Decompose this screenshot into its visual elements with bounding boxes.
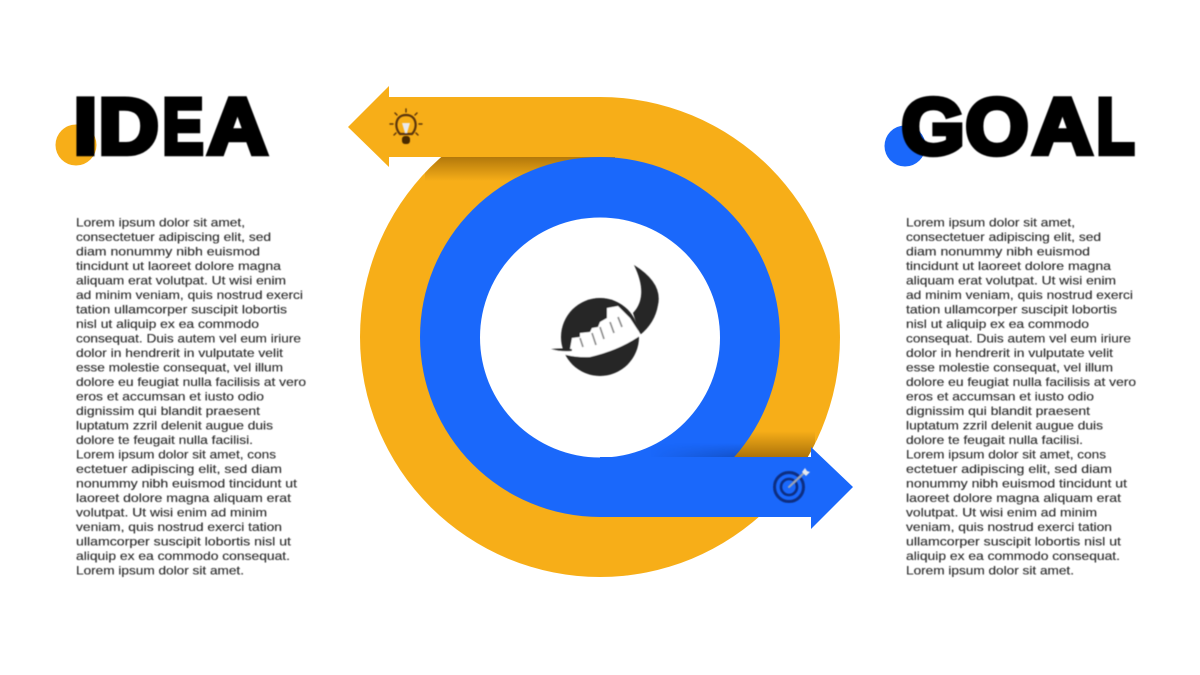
icon: orange dot <box>56 124 96 166</box>
text block: goal description: volutpat. Ut wisi enim ad minim <box>906 506 1097 520</box>
white centre <box>480 218 720 458</box>
text block: idea description: ullamcorper suscipit lobortis nisl ut <box>76 536 292 548</box>
text block: goal description: dignissim qui blandit praesent <box>906 405 1091 418</box>
text block: idea description: dolor in hendrerit in vulputate velit <box>76 347 284 360</box>
heading: goal: O <box>966 82 1028 170</box>
panel: goal <box>884 82 1136 578</box>
text block: idea description: dolore eu feugiat nulla facilisis at vero <box>76 376 306 389</box>
text block: goal description: nisl ut aliquip ex ea commodo <box>906 318 1089 331</box>
text block: idea description: dolore te feugait nulla facilisi. <box>76 434 253 447</box>
arrow: orange pointing left <box>348 86 600 167</box>
text block: goal description: consequat. Duis autem vel eum iriure <box>906 332 1131 346</box>
text block: idea description: aliquam erat volutpat. Ut wisi enim <box>76 274 286 288</box>
text block: goal description: consectetuer adipiscing elit, sed <box>906 231 1101 244</box>
text block: idea description: volutpat. Ut wisi enim ad minim <box>76 506 267 520</box>
text block: idea description: tation ullamcorper suscipit lobortis <box>76 304 287 316</box>
heading: goal: G <box>902 82 964 170</box>
text block: idea description: dignissim qui blandit praesent <box>76 405 261 418</box>
text block: goal description: tincidunt ut laoreet dolore magna <box>906 260 1112 273</box>
text block: idea description: veniam, quis nostrud exerci tation <box>76 521 282 534</box>
text block: goal description: luptatum zzril delenit augue duis <box>906 420 1103 432</box>
heading: goal <box>902 82 1134 170</box>
text block: idea description: consectetuer adipiscing elit, sed <box>76 231 271 244</box>
icon: target with dart <box>774 468 810 502</box>
shadow above blue arrow on orange <box>734 434 815 457</box>
orange ring <box>360 97 840 577</box>
text block: goal description: diam nonummy nibh euismod <box>906 246 1090 258</box>
text block: idea description: luptatum zzril delenit augue duis <box>76 420 273 432</box>
heading: idea <box>74 82 268 170</box>
icon: blue dot <box>884 126 926 166</box>
text block: goal description: dolore eu feugiat nulla facilisis at vero <box>906 376 1136 389</box>
text block: idea description: Lorem ipsum dolor sit amet, cons <box>76 448 276 462</box>
text block: idea description: esse molestie consequat, vel illum <box>76 362 283 374</box>
text block: idea description: ad minim veniam, quis nostrud exerci <box>76 289 303 302</box>
text block: idea description: nisl ut aliquip ex ea commodo <box>76 318 259 331</box>
text block: idea description: diam nonummy nibh euismod <box>76 246 260 258</box>
hand <box>551 306 641 357</box>
heading: idea: A <box>208 82 268 170</box>
text block: idea description <box>76 216 306 578</box>
text block: idea description: aliquip ex ea commodo consequat. <box>76 550 290 563</box>
blue ring <box>420 157 780 517</box>
shadow under orange arrow <box>425 157 615 178</box>
text block: goal description: Lorem ipsum dolor sit amet, <box>906 216 1075 230</box>
text block: goal description: dolor in hendrerit in vulputate velit <box>906 347 1114 360</box>
text block: goal description: esse molestie consequat, vel illum <box>906 362 1113 374</box>
heading: goal: L <box>1096 82 1134 170</box>
text block: goal description <box>906 216 1136 578</box>
shadow on blue ring <box>664 445 744 457</box>
text block: idea description: nonummy nibh euismod tincidunt ut <box>76 478 298 490</box>
heading: idea: D <box>99 82 159 170</box>
crescent <box>633 265 659 335</box>
text block: goal description: tation ullamcorper suscipit lobortis <box>906 304 1117 316</box>
text block: idea description: tincidunt ut laoreet dolore magna <box>76 260 282 273</box>
text block: goal description: nonummy nibh euismod tincidunt ut <box>906 478 1128 490</box>
arrow: blue pointing right <box>600 447 853 529</box>
text block: goal description: Lorem ipsum dolor sit amet. <box>906 564 1074 578</box>
text block: goal description: ectetuer adipiscing elit, sed diam <box>906 463 1112 476</box>
text block: goal description: aliquip ex ea commodo consequat. <box>906 550 1120 563</box>
text block: goal description: Lorem ipsum dolor sit amet, cons <box>906 448 1106 462</box>
text block: goal description: ullamcorper suscipit lobortis nisl ut <box>906 536 1122 548</box>
finger lines <box>580 317 622 347</box>
heading: idea: I <box>74 82 97 170</box>
icon: centre hand and globe <box>551 265 659 376</box>
text block: idea description: ectetuer adipiscing elit, sed diam <box>76 463 282 476</box>
panel: idea <box>56 82 306 578</box>
text block: idea description: consequat. Duis autem vel eum iriure <box>76 332 301 346</box>
hand cuff <box>551 348 572 351</box>
icon: light bulb <box>390 109 422 144</box>
text block: goal description: aliquam erat volutpat. Ut wisi enim <box>906 274 1116 288</box>
text block: goal description: laoreet dolore magna aliquam erat <box>906 492 1122 505</box>
text block: idea description: Lorem ipsum dolor sit amet, <box>76 216 245 230</box>
globe <box>561 298 639 376</box>
panel: central circular diagram <box>348 86 853 577</box>
heading: goal: A <box>1032 82 1092 170</box>
text block: idea description: eros et accumsan et iusto odio <box>76 390 264 404</box>
text block: goal description: eros et accumsan et iusto odio <box>906 390 1094 404</box>
heading: idea: E <box>162 82 204 170</box>
text block: goal description: ad minim veniam, quis nostrud exerci <box>906 289 1133 302</box>
text block: idea description: laoreet dolore magna aliquam erat <box>76 492 292 505</box>
text block: goal description: dolore te feugait nulla facilisi. <box>906 434 1083 447</box>
text block: goal description: veniam, quis nostrud exerci tation <box>906 521 1112 534</box>
text block: idea description: Lorem ipsum dolor sit amet. <box>76 564 244 578</box>
